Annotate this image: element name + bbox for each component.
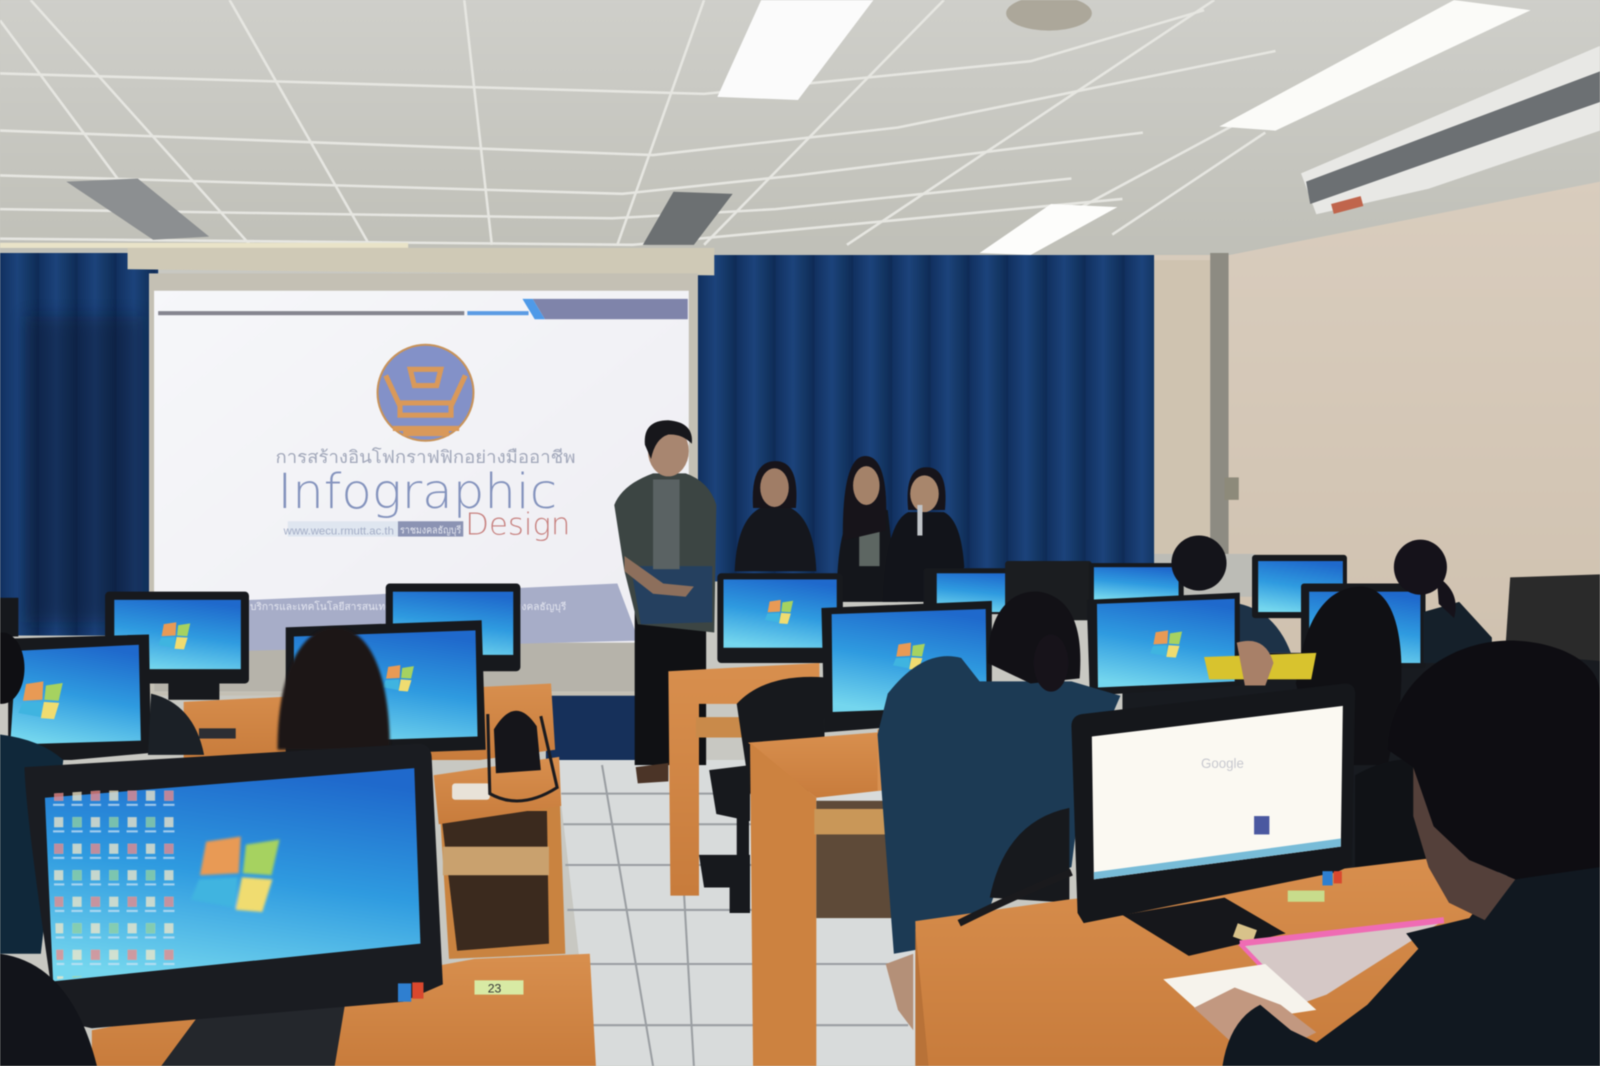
curtain left	[0, 253, 158, 636]
desk number tag	[474, 980, 523, 996]
slide web address: ราชมงคลธัญบุรี	[400, 525, 462, 537]
monitor: far left edge	[0, 598, 18, 637]
handbag	[488, 711, 557, 801]
projector screen housing	[128, 248, 714, 275]
chair middle	[699, 677, 824, 913]
desk number tag: 23	[488, 982, 502, 996]
badge stickers	[398, 982, 423, 1002]
monitor: right back 3	[1301, 583, 1426, 668]
pink pencil case	[1240, 920, 1444, 1005]
ponytail student in navy jacket	[878, 591, 1120, 954]
slide web address: www.wecu.rmutt.ac.th	[283, 526, 394, 538]
ceiling light right	[1219, 0, 1531, 131]
chair right of ponytail student	[990, 808, 1069, 903]
monitor: presenter row 2	[923, 568, 1041, 614]
left student hair	[0, 632, 24, 704]
browser window	[1092, 706, 1343, 879]
vent centre	[643, 192, 733, 245]
presenter woman 3 with microphone	[883, 467, 964, 602]
monitor: back row 1	[105, 592, 249, 700]
cable grommet	[959, 872, 1071, 923]
middle desk back	[668, 663, 819, 896]
right wall	[1141, 182, 1600, 653]
presenter woman 2	[837, 456, 898, 602]
back left desk	[184, 683, 555, 760]
slide header bar	[158, 299, 688, 319]
university seal	[378, 345, 473, 441]
dark backdrop behind front right students	[1122, 653, 1600, 872]
back right student	[1171, 536, 1291, 653]
seated student legs	[886, 954, 913, 1030]
doodle	[1254, 816, 1269, 834]
front left desk	[92, 954, 596, 1066]
student hair centre back	[278, 627, 390, 750]
paper sheet	[1163, 964, 1316, 1025]
jacket	[1222, 857, 1600, 1066]
monitor: right back 1	[1089, 563, 1184, 604]
dark monitor far right	[1505, 574, 1600, 661]
desktop icons	[51, 785, 180, 979]
monitor stand front left	[161, 1005, 345, 1066]
monitor: right back 2	[1252, 555, 1347, 618]
google wordmark: Google	[1201, 756, 1244, 772]
neck and ear	[1413, 767, 1515, 920]
windows desktop screen	[45, 768, 420, 981]
snack wrapper	[1233, 923, 1257, 944]
slide web address	[283, 521, 463, 538]
curtain right	[697, 255, 1154, 581]
left middle desk	[434, 757, 565, 959]
phone on desk	[452, 783, 490, 800]
middle desk front	[748, 729, 908, 1066]
slide lower band	[161, 583, 639, 653]
ceiling light left	[717, 0, 873, 100]
monitor: right middle	[1087, 593, 1240, 696]
air conditioner	[1301, 46, 1600, 214]
hair bottom left	[0, 954, 97, 1066]
taskbar	[1094, 839, 1341, 879]
curtain below the screen	[546, 689, 643, 762]
monitor: front left	[24, 744, 443, 1028]
girl with ponytail far right	[1394, 540, 1492, 663]
vent left	[66, 179, 209, 240]
badge stickers	[1322, 871, 1342, 885]
ceiling	[0, 0, 1600, 265]
monitor: middle row	[821, 601, 992, 732]
yellow box and hand	[1204, 641, 1316, 686]
front right student	[1222, 641, 1600, 1066]
presenter man	[614, 420, 716, 783]
front right desk	[915, 855, 1480, 1066]
monitor stand right	[1122, 898, 1286, 956]
slide subtitle: การสร้างอินโฟกราฟฟิกอย่างมืออาชีพ	[276, 447, 576, 467]
floor	[556, 760, 918, 1066]
dell monitor rear	[1005, 561, 1092, 620]
slide title: Design: Design	[465, 508, 570, 543]
monitor: back row 2	[386, 583, 520, 671]
student long hair right	[1296, 587, 1401, 765]
desk number tag	[1288, 891, 1324, 902]
chair right	[1355, 760, 1434, 867]
monitor: second row left	[8, 634, 151, 760]
student hand	[1194, 987, 1316, 1066]
seated student at left	[0, 734, 63, 954]
monitor: google page	[1071, 683, 1355, 923]
monitor: second row centre	[286, 620, 486, 757]
ceiling light centre	[980, 204, 1117, 255]
smoke detector	[1006, 0, 1092, 31]
windows logo	[191, 836, 280, 912]
monitor: presenter row 1	[717, 573, 843, 663]
projector screen	[149, 273, 698, 696]
slide lower band: บริการและเทคโนโลยีสารสนเทศ มหาวิทยาลัยเทคโนโลยีราชมงคลธัญบุรี	[250, 600, 567, 613]
chair behind left	[148, 694, 204, 755]
presenter woman 1	[735, 461, 816, 571]
slide title: Infographic: Infographic	[278, 464, 557, 520]
hair	[1388, 641, 1600, 879]
